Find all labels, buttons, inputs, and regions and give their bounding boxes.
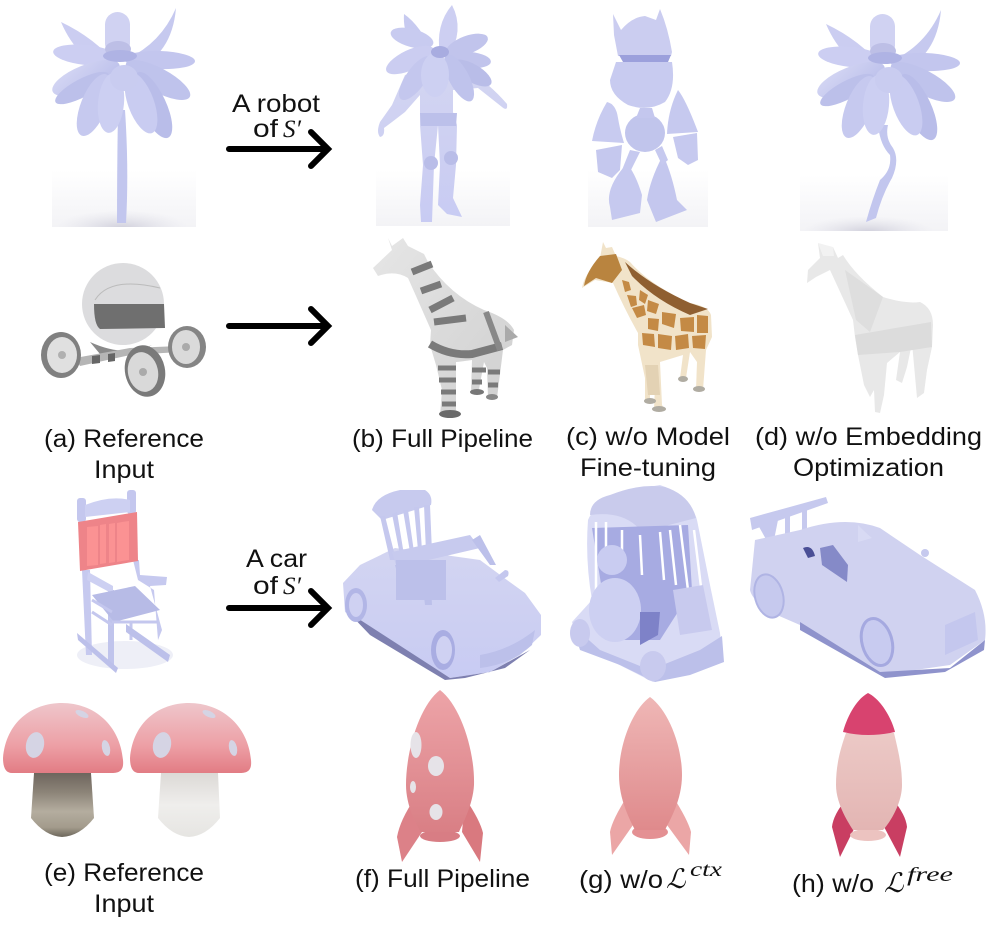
arrow: buggy to giraffe [229,309,328,343]
image: mushroom, white stem [130,703,251,837]
caption: (h) w/o L^free: (h) w/o [792,870,874,898]
arrow: palm to robot [229,132,328,166]
caption: (g) w/o L^ctx: ℒ [666,864,686,895]
label: A car of S': S′ [283,573,302,600]
image: striped giraffe full pipeline [373,238,518,418]
caption: (a) Reference Input [44,425,204,484]
caption: (d) w/o Embedding Optimization: Optimization [793,454,944,482]
label: A car of S': of [253,572,278,600]
label: A robot of S' [232,90,320,143]
image: plain pink rocket without ctx loss [610,697,691,855]
caption: (c) w/o Model Fine-tuning: (c) w/o Model [566,423,730,451]
caption: (d) w/o Embedding Optimization: (d) w/o Embedding [755,423,982,451]
caption: (a) Reference Input: Input [94,456,154,484]
label: A car of S': A car [246,545,307,573]
image: palm tree reference input [52,8,196,227]
label: A robot of S': A robot [232,90,320,118]
caption: (g) w/o L^ctx [579,859,722,895]
caption: (h) w/o L^free: ℒ [884,868,904,899]
caption: (b) Full Pipeline: (b) Full Pipeline [352,425,533,453]
image: plain giraffe without embedding optimization [807,243,933,413]
caption: (h) w/o L^free [792,864,953,899]
caption: (h) w/o L^free: free [907,864,953,886]
caption: (g) w/o L^ctx: (g) w/o [579,866,663,894]
caption: (a) Reference Input: (a) Reference [44,425,204,453]
caption: (g) w/o L^ctx: ctx [690,859,722,881]
image: robot without model fine-tuning [588,9,708,227]
image: chair-car full pipeline [343,490,541,680]
caption: (e) Reference Input: Input [94,890,154,918]
caption: (f) Full Pipeline: (f) Full Pipeline [355,865,530,893]
image: cage car without fine-tuning [570,485,724,682]
image: robot with palm head (full pipeline) [376,5,510,226]
image: sports car without embedding optimization [750,497,986,678]
caption: (e) Reference Input: (e) Reference [44,859,204,887]
label: A robot of S': S′ [283,116,302,143]
image: textured giraffe without fine-tuning [582,242,712,412]
image: mushroom, textured [3,703,123,837]
image: rocking chair with highlighted back [77,490,173,673]
image: palm without embedding optimization [800,10,960,248]
arrow: chair to car [229,591,328,625]
image: buggy reference input [41,263,206,401]
caption: (c) w/o Model Fine-tuning: Fine-tuning [580,454,716,482]
image: spotted rocket full pipeline [397,690,483,862]
label: A robot of S': of [253,115,278,143]
caption: (d) w/o Embedding Optimization [755,423,982,482]
caption: (e) Reference Input [44,859,204,918]
label: A car of S' [246,545,307,600]
caption: (c) w/o Model Fine-tuning [566,423,730,482]
image: rocket with dark nose and fins [832,693,907,857]
